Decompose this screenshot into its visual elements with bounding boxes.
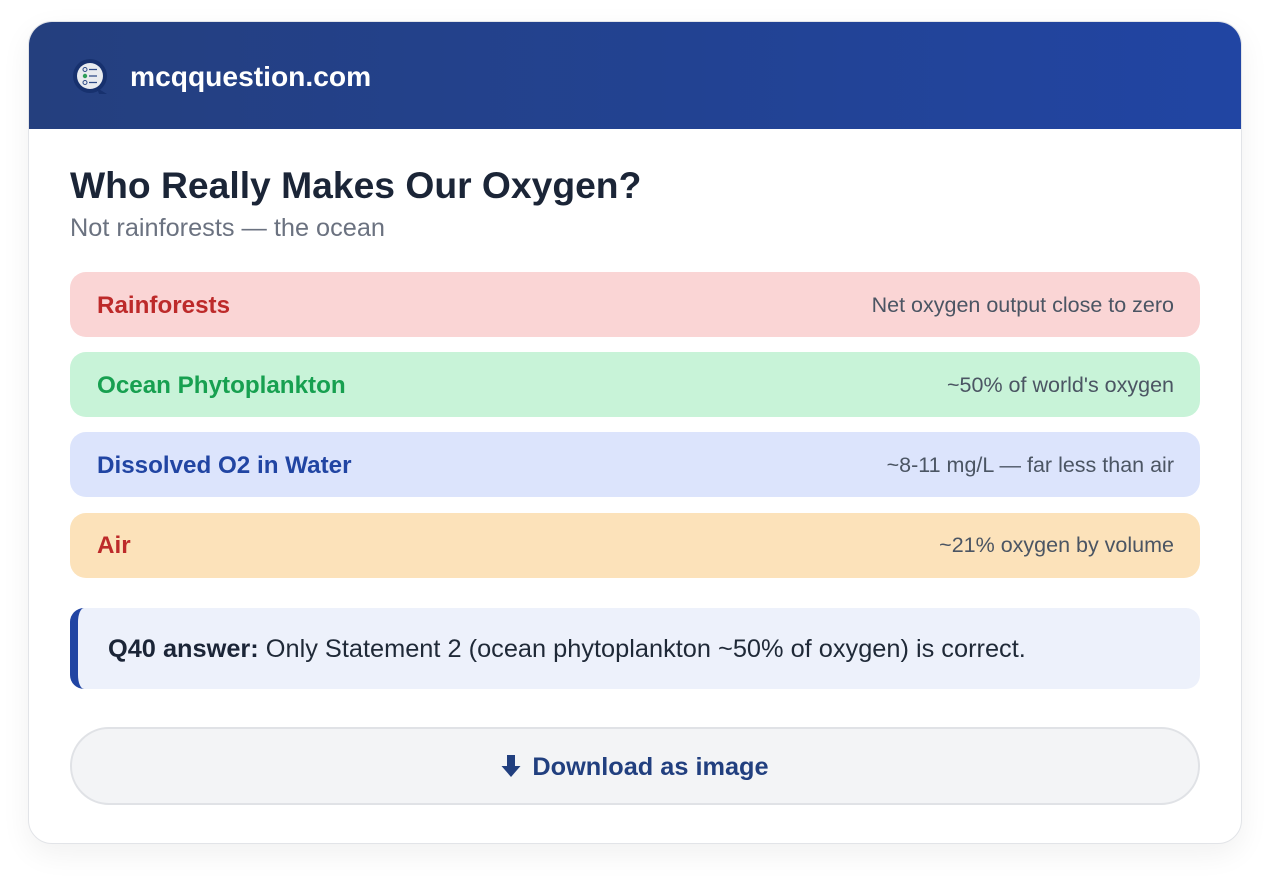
row: rainforests: Net oxygen output close to zero <box>872 293 1174 317</box>
row: dissolved O2: Dissolved O2 in Water <box>97 452 352 479</box>
row: air: ~21% oxygen by volume <box>939 533 1174 557</box>
row: dissolved O2: ~8-11 mg/L — far less than air <box>887 453 1174 477</box>
title: Who Really Makes Our Oxygen? <box>70 164 641 206</box>
answer callout: Q40 answer: Only Statement 2 (ocean phytoplankton ~50% of oxygen) is correct. <box>108 635 1026 663</box>
button label: Download as image <box>532 753 769 781</box>
site name: mcqquestion.com <box>130 60 371 92</box>
icon: quiz logo <box>73 59 107 94</box>
row: air: Air <box>97 532 131 559</box>
header band <box>29 22 1241 129</box>
row: ocean phytoplankton: ~50% of world's oxygen <box>947 373 1174 397</box>
row: rainforests: Rainforests <box>97 292 230 319</box>
download button <box>70 727 1200 805</box>
row: ocean phytoplankton: Ocean Phytoplankton <box>97 372 346 399</box>
subtitle: Not rainforests — the ocean <box>70 214 385 242</box>
row: rainforests <box>70 272 1200 337</box>
row: ocean phytoplankton <box>70 352 1200 417</box>
answer callout <box>70 608 1200 689</box>
row: dissolved O2 <box>70 432 1200 497</box>
row: air <box>70 513 1200 578</box>
